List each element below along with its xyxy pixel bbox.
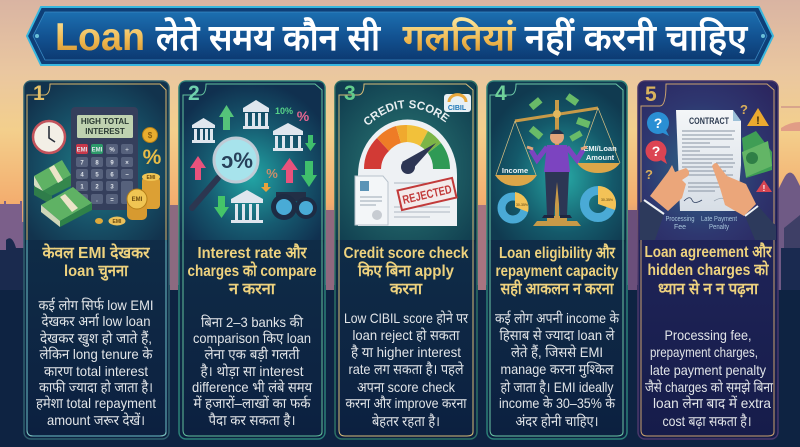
body text 3: बेहतर रहता है। (372, 413, 440, 429)
text: credit score arc: CREDIT SCORE (364, 100, 450, 125)
icon: calculator: 4 (80, 172, 84, 178)
icon: question bubbles: ? (652, 143, 660, 159)
icon: calculator: 8 (95, 160, 99, 166)
icon: CIBIL logo (444, 94, 471, 112)
heading 4: Loan eligibility और (499, 243, 616, 262)
icon: balance scale (495, 100, 620, 226)
icon: calculator: EMI (77, 148, 88, 154)
body text 1: काफी ज्यादा हो जाता है। (39, 379, 153, 395)
icon: balance scale: Amount (586, 153, 615, 162)
body text 1 (36, 297, 156, 428)
chart: emi donut right (584, 186, 616, 218)
panel 1: EMI (24, 81, 169, 439)
panel 5: contract: ध्यान से न न पढ़ना (658, 279, 759, 298)
label: processing fee: Fee (674, 224, 686, 231)
body text 3: करना और improve करना (346, 395, 467, 411)
body text 1: देखकर अर्ना low loan (42, 313, 150, 329)
icon: contract document (676, 110, 741, 211)
icon: cash stacks (34, 160, 92, 227)
icon: EMI coins: $ (148, 131, 153, 140)
body text 4 (495, 310, 619, 429)
icon: EMI coins (95, 128, 162, 226)
icon: calculator: INTEREST (85, 127, 125, 136)
badge number 1: 1 (33, 82, 45, 105)
icon: calculator: 0 (80, 198, 84, 204)
icon: question bubbles: ? (654, 115, 662, 131)
panel 2: compare (179, 81, 325, 439)
text: rates: % (266, 166, 278, 181)
icon: warning triangles: ! (763, 184, 765, 193)
body text 5: late payment penalty (650, 362, 766, 378)
label: processing fee (666, 216, 695, 231)
body text 2: में हजारों–लाखों का फर्क (194, 395, 311, 411)
heading 5: Loan agreement और (644, 242, 773, 261)
icon: CIBIL logo: CIBIL (448, 105, 467, 112)
panel 3: credit score: करना (389, 281, 423, 298)
icon: calculator: 7 (80, 160, 84, 166)
panel 4: eligibility: सही आकलन न करना (500, 279, 614, 298)
chart: emi donut right: 30-35% (601, 198, 613, 202)
icon: bank buildings (192, 100, 303, 223)
panel 1: EMI: loan चुनना (64, 263, 129, 281)
body text 4: manage करना मुश्किल (500, 361, 614, 378)
body text 1: amount जरूर देखें। (47, 412, 145, 428)
text: rates: 10% (275, 106, 293, 116)
label: processing fee: Processing (666, 216, 695, 223)
panel 2: compare: charges को compare (188, 261, 317, 280)
icon: EMI coins: EMI (113, 219, 122, 225)
chart: income donut left: 30-35% (516, 203, 528, 207)
panel 3: credit score (334, 80, 478, 440)
title banner (27, 7, 773, 65)
body text 5: cost बढ़ा सकता है। (662, 413, 752, 429)
icon: calculator: % (109, 148, 115, 154)
panel 5: contract: hidden charges को (648, 260, 769, 279)
icon: calculator: . (96, 198, 98, 204)
icon: question bubbles (645, 102, 748, 182)
label: income: Income (502, 166, 528, 175)
panel 2: compare: न करना (228, 281, 276, 298)
icon: hands (640, 163, 776, 240)
body text 1: लेकिन long tenure के (40, 346, 153, 362)
badge number 4: 4 (495, 82, 507, 105)
label: emi/loan amount: EMI/Loan (583, 144, 617, 153)
body text 2: बिना 2–3 banks की (201, 314, 303, 330)
heading 1: केवल EMI देखकर (42, 243, 151, 262)
body text 1: देखकर खुश हो जाते हैं, (40, 330, 152, 347)
icon: binoculars (271, 192, 317, 220)
icon: rejected document (355, 176, 457, 225)
body text 3: अपना score check (357, 379, 456, 395)
icon: calculator: 2 (95, 184, 99, 190)
icon: EMI coins: % (143, 146, 162, 169)
body text 5: जैसे charges को समझे बिना (645, 379, 773, 395)
icon: calculator: − (125, 172, 129, 178)
body text 1: हमेशा total repayment (36, 395, 156, 411)
badge number 5: 5 (645, 83, 657, 106)
body text 5: Processing fee, (664, 327, 752, 343)
title text: नहीं करनी चाहिए (524, 17, 749, 58)
icon: clock (33, 121, 65, 153)
panel 4: eligibility: repayment capacity (496, 263, 619, 280)
icon: calculator: HIGH TOTAL (81, 117, 129, 126)
body text 2: difference भी लंबे समय (192, 379, 313, 395)
text: rates: % (297, 108, 310, 124)
body text 3: rate लग सकता है। पहले (348, 361, 464, 377)
icon: contract document: CONTRACT (689, 116, 729, 126)
badge number 3: 3 (344, 82, 356, 105)
icon: question bubbles: ? (645, 167, 653, 182)
body text 1: कई लोग सिर्फ low EMI (38, 297, 154, 313)
panel 3: credit score: किए बिना apply (357, 261, 454, 280)
icon: calculator: × (125, 160, 129, 166)
icon: warning triangles (747, 108, 772, 193)
icon: warning triangles: ! (756, 115, 760, 127)
title text: लेते समय कौन सी (155, 17, 382, 58)
icon: question bubbles: ? (740, 102, 748, 117)
title text: Loan (55, 16, 145, 59)
icon: EMI coins: EMI (147, 175, 156, 181)
body text 1: कारण total interest (44, 363, 148, 379)
icon: gauge (358, 119, 457, 226)
body text 2 (192, 314, 313, 428)
panel 5: contract (638, 81, 778, 439)
label: late payment penalty: Penalty (709, 224, 729, 231)
body text 3: loan reject हो सकता (352, 327, 460, 343)
body text 3 (344, 310, 468, 429)
icon: EMI coins: EMI (132, 197, 143, 203)
icon: calculator: ÷ (125, 148, 129, 154)
body text 4: लेते हैं, जिससे EMI (511, 344, 603, 360)
icon: calculator: 9 (110, 160, 114, 166)
icon: calculator: 6 (110, 172, 114, 178)
body text 5: prepayment charges, (650, 344, 758, 360)
icon: banknotes (742, 131, 772, 178)
icon: calculator: 1 (80, 184, 84, 190)
icon: calculator: = (110, 198, 114, 204)
icon: flying banknotes (529, 93, 591, 142)
text: rates (266, 106, 310, 181)
body text 4: income के 30–35% के (499, 395, 615, 411)
icon: calculator (71, 107, 138, 210)
icon: man shrugging (527, 130, 587, 218)
title text: गलतियां (402, 17, 517, 58)
body text 2: पैदा कर सकता है। (208, 412, 296, 428)
title text (55, 16, 749, 59)
chart: income donut left (502, 192, 529, 220)
icon: magnifying glass: ↄ% (221, 148, 253, 173)
label: late payment penalty (701, 216, 737, 231)
icon: up and down arrows (190, 105, 317, 218)
body text 3: Low CIBIL score होने पर (344, 310, 468, 326)
icon: calculator: 3 (110, 184, 114, 190)
body text 4: अंदर होनी चाहिए। (516, 413, 598, 429)
icon: magnifying glass (192, 138, 258, 208)
body text 4: हो जाता है। EMI ideally (500, 379, 614, 395)
heading 2: Interest rate और (198, 243, 308, 262)
body text 2: comparison किए loan (193, 330, 311, 346)
icon: calculator: EMI (92, 148, 103, 154)
body text 2: है। थोड़ा सा interest (200, 363, 304, 379)
body text 2: लेना एक बड़ी गलती (204, 346, 300, 362)
icon: rejected document: REJECTED (401, 182, 453, 207)
body text 5 (645, 327, 773, 429)
body text 4: हिसाब से ज्यादा loan ले (500, 327, 615, 343)
badge number 2: 2 (188, 82, 200, 105)
panel 4: eligibility (487, 81, 627, 439)
label: late payment penalty: Late Payment (701, 216, 737, 223)
icon: calculator: 5 (95, 172, 99, 178)
body text 4: कई लोग अपनी income के (495, 310, 619, 326)
heading 3: Credit score check (344, 245, 469, 262)
body text 3: है या higher interest (351, 344, 461, 360)
body text 5: loan लेना बाद में extra (653, 395, 771, 411)
